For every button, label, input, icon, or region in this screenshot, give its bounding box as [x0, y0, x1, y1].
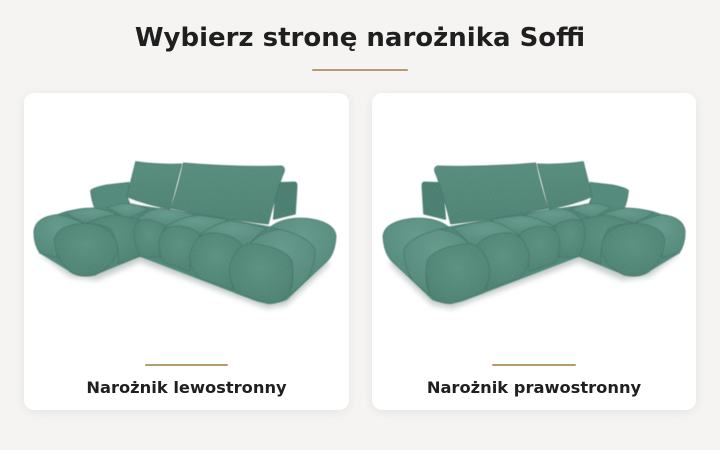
panel: right-hand corner sofa card	[372, 93, 696, 410]
left card accent rule	[145, 364, 228, 366]
title accent rule	[312, 69, 408, 71]
image: right-hand corner sofa	[383, 162, 685, 308]
panel: left-hand corner sofa card	[24, 93, 349, 410]
right card label: Narożnik prawostronny	[427, 378, 641, 397]
left card label: Narożnik lewostronny	[86, 378, 287, 397]
title: Wybierz stronę narożnika Soffi	[135, 23, 585, 53]
image: left-hand corner sofa	[34, 162, 336, 308]
right card accent rule	[492, 364, 576, 366]
